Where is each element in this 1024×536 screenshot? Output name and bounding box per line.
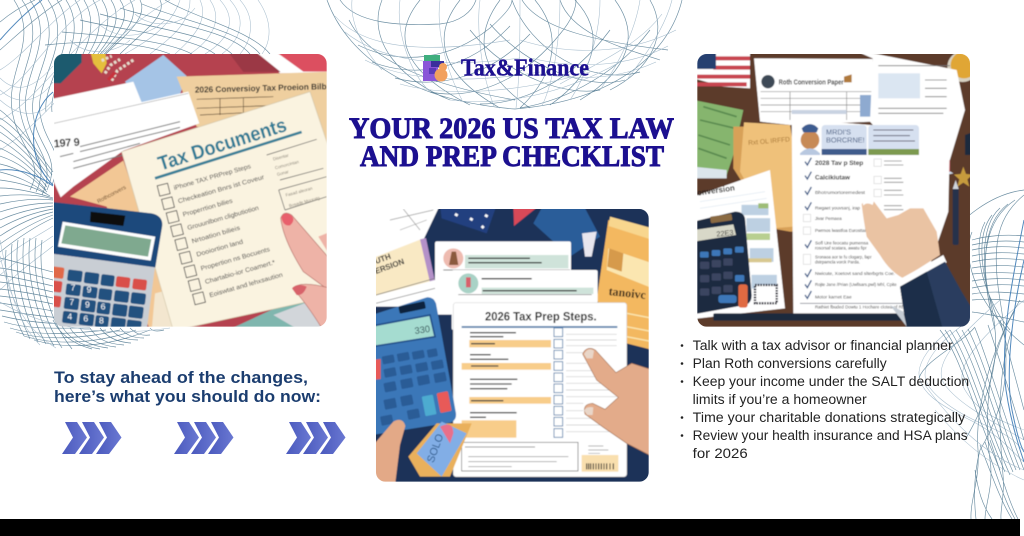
- callout text: To stay ahead of the changes,: [54, 369, 308, 387]
- tan paper under calculator: [70, 161, 187, 331]
- bullet dots: [681, 344, 683, 437]
- logo: [423, 55, 589, 82]
- bullet list: Review your health insurance and HSA plans: [693, 428, 968, 443]
- calculator: [372, 297, 456, 435]
- checklist paper: Rojte Jane /Prian (Uwllsars.pwl) Mhl, Cpite: [815, 282, 897, 287]
- back white sheets: [435, 241, 571, 315]
- highlight rows: [462, 340, 551, 438]
- bullet list: Time your charitable donations strategically: [693, 410, 965, 425]
- manila folders: Rxt OL IRFFD: [748, 136, 790, 147]
- calculator: 9: [85, 299, 90, 309]
- roth conversion paper: [754, 58, 873, 125]
- black footer bar: [0, 519, 1020, 536]
- american flag: [697, 54, 751, 90]
- bullet list: limits if you’re a homeowner: [693, 392, 867, 407]
- roth conversion paper: Roth Conversion Paper: [779, 77, 844, 86]
- arrow: chevrons 2: [174, 422, 234, 454]
- teal folder corner: [54, 54, 82, 84]
- left sheet with calculator: [693, 170, 785, 319]
- top right paper: [860, 54, 966, 175]
- small flag badge: [582, 232, 597, 257]
- flag ornament: [90, 50, 133, 81]
- calculator: 6: [83, 314, 88, 324]
- mesh pattern: left: [0, 0, 270, 349]
- photo panel: 2026 tax prep steps: [372, 205, 653, 486]
- calculator: 7: [71, 283, 76, 293]
- cream checklist sheet: Bosade Mooratg: [288, 195, 321, 208]
- credit card and receipts: [408, 422, 472, 477]
- tan form: [176, 71, 327, 142]
- cream checklist sheet: Nrtoation bilieis: [191, 225, 241, 245]
- cream checklist sheet: iPhone TAX PRPrep Steps: [173, 163, 252, 192]
- roth conversion form: UTH: [374, 252, 392, 266]
- checklist paper: Sofl Ure feocatu pumensa: [815, 240, 869, 245]
- star and pen: [953, 167, 973, 245]
- calculator: 4: [67, 311, 72, 321]
- cream checklist sheet: Eoiswtat and lehxsaution: [209, 271, 284, 299]
- hand pointing: [281, 213, 331, 331]
- checklist paper: Calcikiutaw: [815, 174, 850, 181]
- cash: [693, 100, 743, 178]
- cream checklist sheet: Checkeation Bnrs ist Coveur: [177, 174, 265, 205]
- calculator: 8: [99, 316, 104, 326]
- front sheet: [453, 303, 627, 477]
- checklist paper: Rathiet fbuded Dowtu 1 Hochare clotea of Rhane: [815, 305, 912, 310]
- calculator: 330: [414, 324, 431, 336]
- checklist paper: Pwrmos lwastfoa Eurosttaiks: [815, 228, 870, 233]
- credit card and receipts: SOLO: [425, 432, 446, 464]
- logo icon: [423, 55, 448, 82]
- arrow: chevrons 3: [286, 422, 346, 454]
- calculator: 6: [101, 301, 106, 311]
- yellow folder: tanoivc: [608, 284, 647, 302]
- tan paper under calculator: Rothconvers: [96, 185, 127, 205]
- cream checklist sheet: Comorcintan: [274, 159, 300, 170]
- stars flag: [440, 209, 496, 234]
- arrow: chevrons 1: [62, 422, 122, 454]
- tan form: 2026 Conversioy Tax Proeion Bilb: [195, 81, 327, 95]
- cream checklist sheet: Dooiortion land: [196, 238, 245, 259]
- grid paper: [376, 209, 440, 258]
- cream checklist sheet: Properrtion bilies: [182, 198, 234, 219]
- bottom tray: [713, 313, 920, 321]
- callout text: [54, 369, 321, 406]
- cream checklist sheet: Propertion ns Bocuents: [200, 246, 271, 273]
- left thumb: [376, 419, 406, 482]
- logo wordmark: Tax&Finance: [461, 56, 589, 82]
- blue envelope: [125, 55, 187, 103]
- title: AND PREP CHECKLIST: [360, 140, 664, 173]
- bullet list: [681, 338, 969, 461]
- checklist paper: Rwgaet youvsanj, irap: [815, 206, 861, 211]
- calculator: 7: [69, 297, 74, 307]
- mesh pattern: right: [919, 190, 1024, 519]
- bullet list: Keep your income under the SALT deduction: [693, 374, 969, 389]
- callout text: here’s what you should do now:: [54, 388, 321, 406]
- checklist paper: Sronaoa aor te fu clogarp, fapr: [815, 254, 872, 259]
- title: YOUR 2026 US TAX LAW: [349, 112, 674, 145]
- cream checklist sheet: Chartabio-ior Coamert.*: [204, 259, 277, 286]
- checkboxes: [554, 328, 563, 437]
- lower right objects: [234, 302, 305, 327]
- checklist paper: dstrpamcla vorck Parda.: [815, 260, 860, 265]
- front sheet: 2026 Tax Prep Steps.: [485, 310, 597, 324]
- cream checklist sheet: [122, 92, 331, 331]
- white form with number: [50, 92, 199, 197]
- checklist paper: Nwicute, Xoetovt sand slterbgrts Coe.: [815, 271, 895, 276]
- bullet list: Talk with a tax advisor or financial planner: [693, 338, 953, 353]
- photo panel: tax documents: [49, 50, 331, 333]
- roth conversion form: [372, 238, 436, 307]
- checklist paper: BORCRNE!: [826, 135, 865, 144]
- left sheet with calculator: 22E3: [716, 228, 734, 239]
- white form back: [50, 82, 143, 125]
- right hand pointing: [583, 348, 653, 457]
- yellow folder: [597, 217, 653, 350]
- checkbox list: [157, 183, 205, 305]
- pointing hand in suit: [862, 198, 974, 331]
- calculator: 9: [87, 285, 92, 295]
- manila folders: [733, 122, 797, 232]
- checklist paper: [792, 118, 950, 313]
- cream checklist sheet: Gonar: [276, 169, 290, 177]
- cream checklist sheet: Tax Documents: [156, 114, 289, 175]
- mesh pattern: top center: [327, 0, 682, 109]
- calculator: [49, 202, 162, 333]
- roth conversion form: ERSION: [374, 257, 406, 276]
- checklist paper: Jivar Pernaea: [815, 216, 842, 221]
- checklist paper: rosorsaf scatara, awatu fipr: [815, 246, 867, 251]
- desk edge right: [965, 132, 974, 155]
- cream checklist sheet: Disentar: [272, 152, 290, 162]
- red corner: [230, 54, 327, 74]
- checklist paper: MRDI'S: [826, 127, 851, 136]
- gold coin: [946, 54, 970, 83]
- title: [349, 112, 674, 173]
- bullet list: for 2026: [693, 446, 748, 461]
- checklist paper: Bhotrumortoremedest: [815, 190, 866, 195]
- checklist paper: 2028 Tav p Step: [815, 160, 863, 167]
- cream checklist sheet: Fasad aleoran: [285, 185, 314, 198]
- checklist paper: Motor kamet Eae: [815, 294, 852, 299]
- blue window sheet: [533, 205, 600, 257]
- left sheet with calculator: onversion: [696, 183, 736, 198]
- cream checklist sheet: Grouunlbom cligbutiotion: [187, 205, 260, 232]
- footer box: [462, 442, 578, 471]
- photo panel: roth conversion checklist: [693, 50, 978, 331]
- red pennant: [512, 209, 536, 227]
- white form with number: 197 9: [53, 137, 80, 150]
- bullet list: Plan Roth conversions carefully: [693, 356, 887, 371]
